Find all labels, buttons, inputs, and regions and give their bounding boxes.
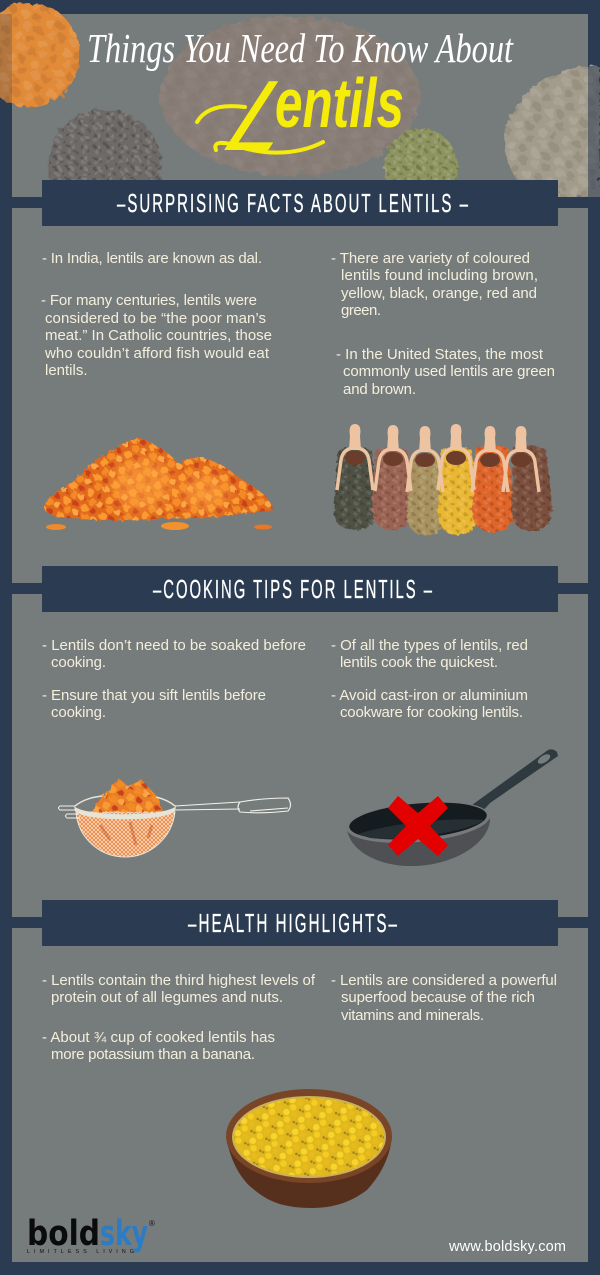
text: health left column: protein out of all legumes and nuts. xyxy=(51,989,283,1006)
logo: boldsky: bold xyxy=(27,1214,100,1254)
title xyxy=(87,25,514,172)
text: facts left column: lentils. xyxy=(45,362,88,379)
icon: red cross xyxy=(388,796,448,856)
image: red lentil pile xyxy=(44,438,273,530)
text: health left column xyxy=(42,972,316,1063)
text: facts right column: and brown. xyxy=(343,381,416,398)
heading bar: surprising facts xyxy=(42,180,558,226)
text: cooking right column: cookware for cooking lentils. xyxy=(340,704,523,721)
logo: boldsky xyxy=(27,1214,155,1255)
title word: Lentils: entils xyxy=(275,64,404,142)
image: coloured lentils with scoops xyxy=(334,424,552,535)
text: facts right column: - There are variety of coloured xyxy=(331,250,530,267)
text: health left column: more potassium than a banana. xyxy=(51,1046,255,1063)
panel: title background xyxy=(12,14,588,197)
title word: Lentils xyxy=(202,60,404,172)
text: facts right column: green. xyxy=(341,302,381,319)
text: cooking left column: cooking. xyxy=(51,654,106,671)
text: facts left column: - For many centuries, lentils were xyxy=(41,292,257,309)
text: cooking left column: - Lentils don’t need to be soaked before xyxy=(42,637,306,654)
text: facts right column: - In the United States, the most xyxy=(336,346,544,363)
text: cooking right column: lentils cook the quickest. xyxy=(340,654,498,671)
heading bar: health highlights: –HEALTH HIGHLIGHTS– xyxy=(188,908,399,938)
text: facts left column: who couldn’t afford fish would eat xyxy=(44,345,270,362)
text: facts right column: yellow, black, orange, red and xyxy=(341,285,537,302)
image: bowl of cooked lentils xyxy=(226,1089,392,1208)
text: health right column: - Lentils are considered a powerful xyxy=(331,972,557,989)
text: facts left column: - In India, lentils are known as dal. xyxy=(42,250,262,267)
title word: Lentils: L xyxy=(202,60,330,172)
logo: boldsky: sky xyxy=(100,1214,148,1254)
text: facts left column: considered to be “the poor man’s xyxy=(45,310,266,327)
image: strainer with lentils xyxy=(58,778,290,857)
text: health right column xyxy=(331,972,557,1024)
text: cooking right column: - Avoid cast-iron or aluminium xyxy=(331,687,528,704)
text: cooking right column: - Of all the types of lentils, red xyxy=(331,637,528,654)
text: cooking left column xyxy=(42,637,306,721)
panel: surprising facts background xyxy=(12,208,588,583)
logo: boldsky: LIMITLESS LIVING xyxy=(27,1249,134,1255)
text: facts right column: commonly used lentils are green xyxy=(343,363,555,380)
image: frying pan xyxy=(345,749,558,866)
text: cooking left column: cooking. xyxy=(51,704,106,721)
text: health left column: - Lentils contain the third highest levels of xyxy=(42,972,316,989)
panel: health highlights background xyxy=(12,928,588,1262)
title swash xyxy=(197,106,323,153)
text: health left column: - About ¾ cup of cooked lentils has xyxy=(42,1029,275,1046)
logo: boldsky: ® xyxy=(149,1219,155,1228)
panel: cooking tips background xyxy=(12,594,588,917)
heading bar: cooking tips xyxy=(42,566,558,612)
text: facts right column xyxy=(331,250,555,398)
text: facts right column: lentils found including brown, xyxy=(341,267,538,284)
heading bar: health highlights xyxy=(42,900,558,946)
text: facts left column xyxy=(41,250,272,379)
image: lentil piles behind title xyxy=(0,3,600,221)
text: health right column: superfood because of the rich xyxy=(341,989,535,1006)
text: cooking left column: - Ensure that you sift lentils before xyxy=(42,687,266,704)
text: facts left column: meat.” In Catholic countries, those xyxy=(45,327,272,344)
text: health right column: vitamins and minerals. xyxy=(341,1007,484,1024)
website url: www.boldsky.com xyxy=(448,1239,566,1255)
text: cooking right column xyxy=(331,637,528,721)
